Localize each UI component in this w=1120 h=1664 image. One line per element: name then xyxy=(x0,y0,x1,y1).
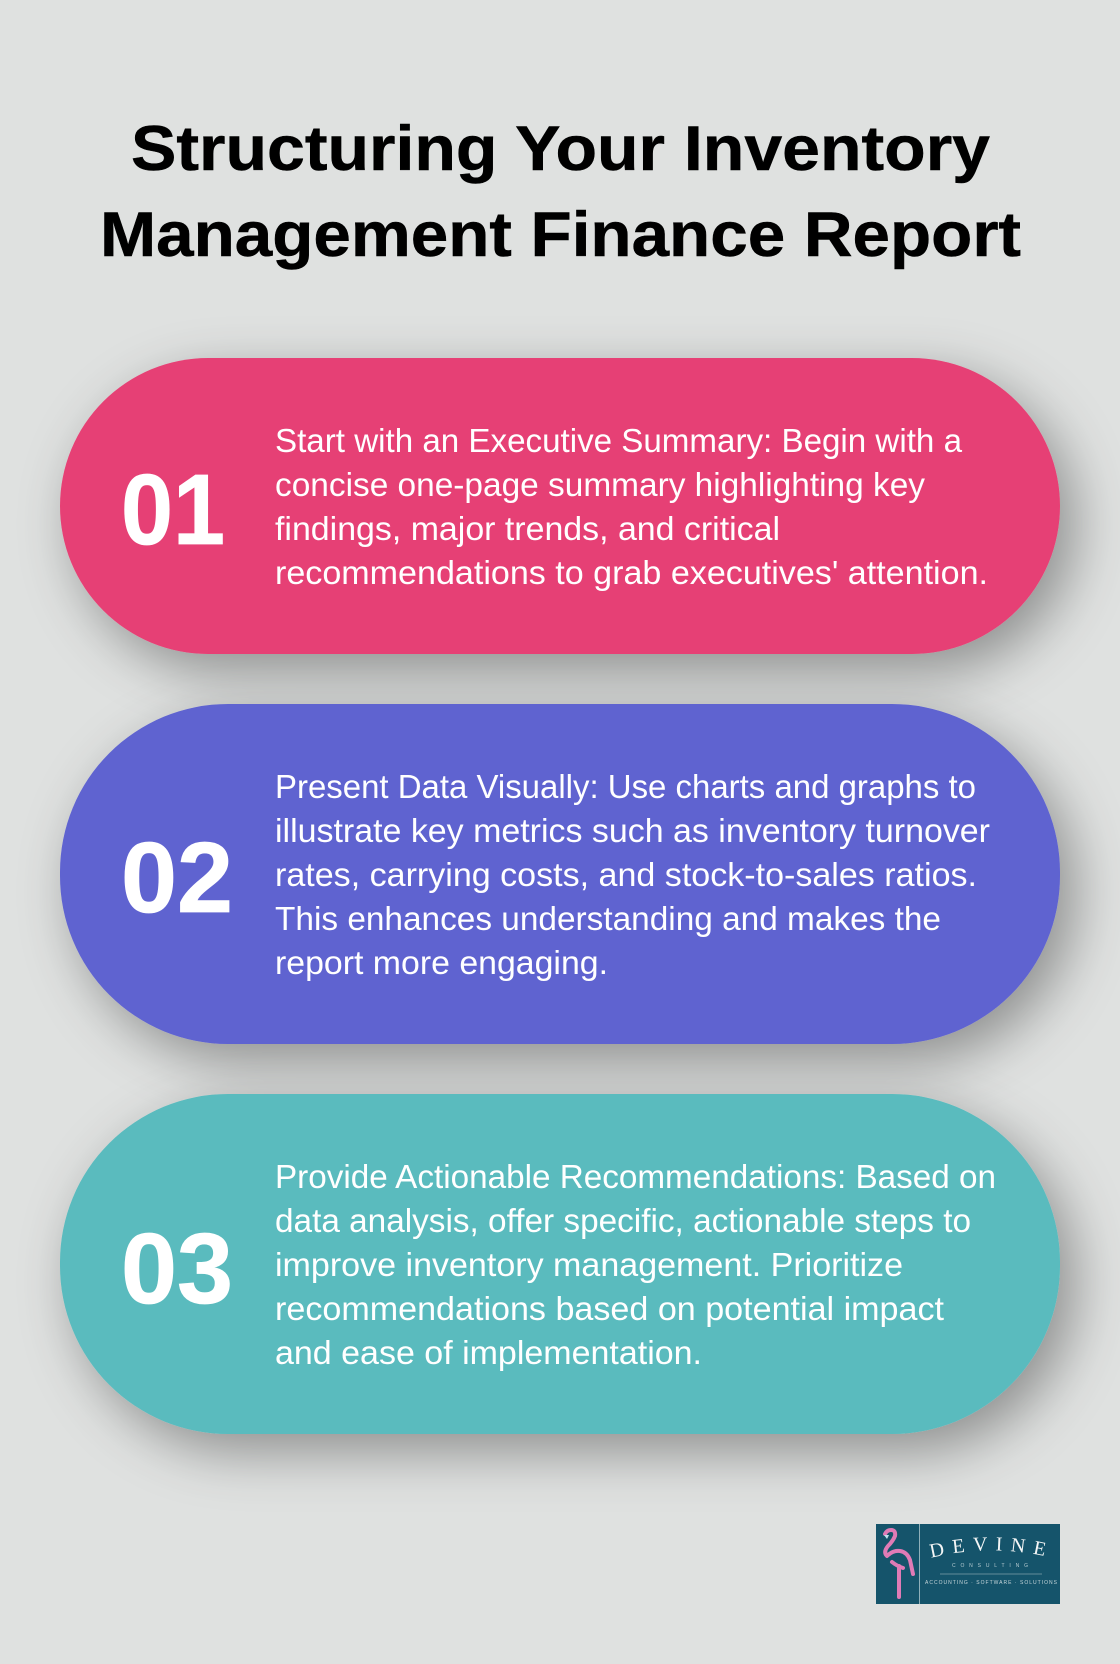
text block 03: and ease of implementation. xyxy=(275,1334,702,1371)
text block 01: recommendations to grab executives' attention. xyxy=(275,554,988,591)
text block 03: improve inventory management. Prioritize xyxy=(275,1246,903,1283)
text block 03: Provide Actionable Recommendations: Based on xyxy=(275,1158,996,1195)
logo tagline: ACCOUNTING · SOFTWARE · SOLUTIONS xyxy=(925,1580,1058,1586)
title xyxy=(100,114,1021,270)
pill background 02 xyxy=(60,704,1060,1044)
panel: step 03 xyxy=(60,1094,1060,1434)
pill background 01 xyxy=(60,358,1060,654)
text block 03 xyxy=(275,1158,996,1371)
number 01: 01 xyxy=(121,454,225,566)
logo background xyxy=(876,1524,1060,1604)
text block 02: rates, carrying costs, and stock-to-sales ratios. xyxy=(275,856,977,893)
text block 02: report more engaging. xyxy=(275,944,608,981)
title: Structuring Your Inventory xyxy=(131,114,990,184)
logo name: DEVINE xyxy=(929,1537,1046,1558)
logo: Devine Consulting xyxy=(876,1524,1060,1604)
text block 01: findings, major trends, and critical xyxy=(275,510,780,547)
text block 02: Present Data Visually: Use charts and graphs to xyxy=(275,768,976,805)
text block 01 xyxy=(275,422,988,591)
text block 01: Start with an Executive Summary: Begin with a xyxy=(275,422,963,459)
text block 02: illustrate key metrics such as inventory turnover xyxy=(275,812,990,849)
text block 02: This enhances understanding and makes the xyxy=(275,900,941,937)
text block 02 xyxy=(275,768,990,981)
panel: step 02 xyxy=(60,704,1060,1044)
text block 03: recommendations based on potential impact xyxy=(275,1290,944,1327)
text block 03: data analysis, offer specific, actionable steps to xyxy=(275,1202,971,1239)
text block 01: concise one-page summary highlighting key xyxy=(275,466,925,503)
panel: step 01 xyxy=(60,358,1060,654)
number 03: 03 xyxy=(121,1213,233,1325)
logo subtitle: CONSULTING xyxy=(952,1563,1028,1569)
icon: flamingo xyxy=(885,1530,913,1597)
title: Management Finance Report xyxy=(100,200,1021,270)
pill background 03 xyxy=(60,1094,1060,1434)
number 02: 02 xyxy=(121,822,233,934)
